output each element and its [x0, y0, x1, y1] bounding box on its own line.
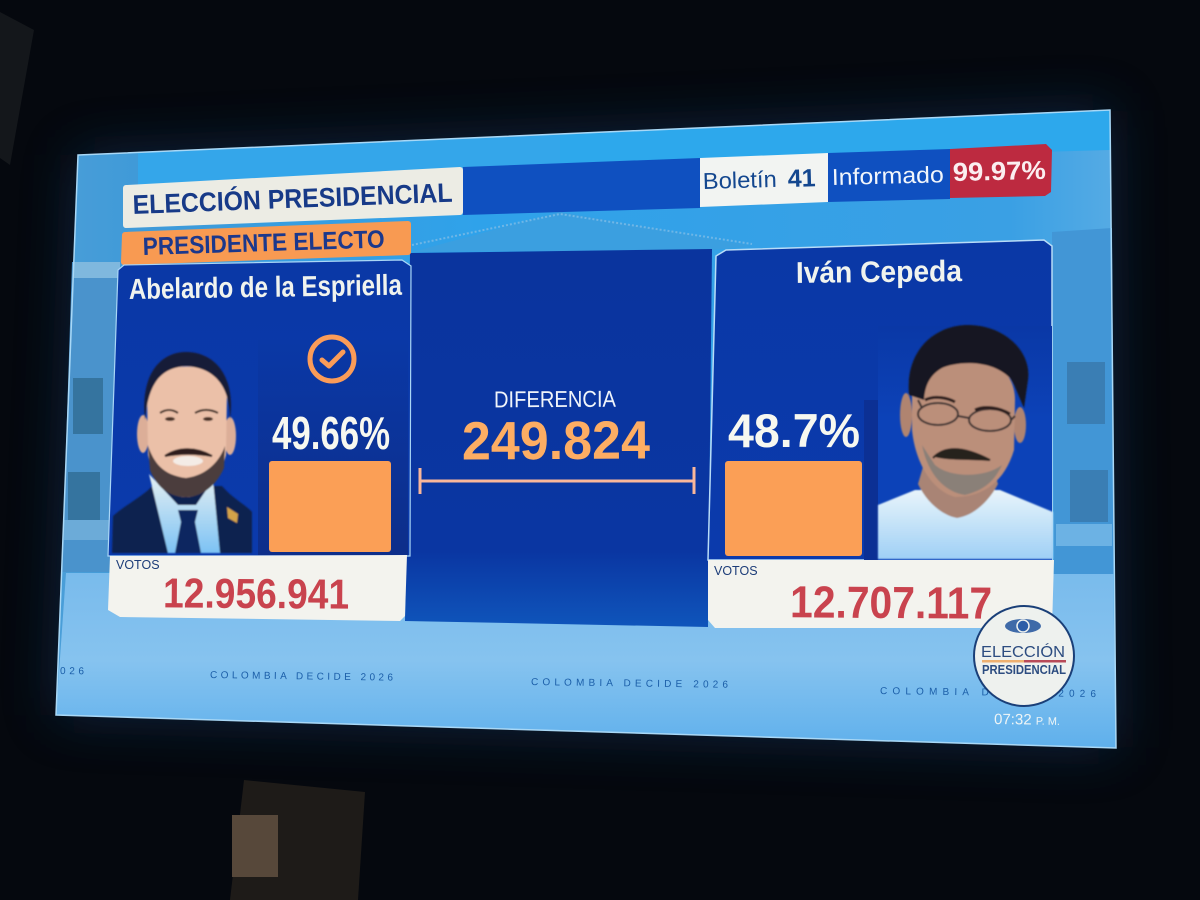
header: reported percentage: [828, 144, 1052, 202]
footer ticker text: 026: [60, 666, 85, 677]
percentage: Abelardo: 49.66%: [272, 407, 390, 459]
palace backdrop right: [1052, 228, 1114, 574]
object at bottom of the room: [230, 780, 365, 900]
center panel: difference: [405, 249, 712, 627]
header: bulletin: Boletín: [702, 166, 777, 194]
portrait: Abelardo: [112, 352, 252, 553]
election logo: ELECCIÓN: [981, 642, 1065, 661]
votes value: 12.707.117: [790, 576, 992, 629]
header: bulletin: [700, 153, 828, 207]
header: reported percentage: 99.97%: [952, 155, 1046, 187]
panel: Abelardo de la Espriella: [108, 260, 411, 621]
percentage: Iván: 48.7%: [728, 404, 860, 457]
votes label: VOTOS: [714, 564, 758, 578]
footer ticker text: COLOMBIA DECIDE 2026: [531, 677, 729, 691]
screen glow: [56, 110, 1116, 748]
label: diferencia: DIFERENCIA: [494, 386, 617, 412]
bright screen edge: [56, 110, 1116, 748]
TV screen: [56, 110, 1116, 748]
clock: 07:32 P. M.: [994, 711, 1060, 729]
footer ticker text: COLOMBIA DECIDE 2026: [210, 670, 394, 684]
bar: Abelardo: [269, 461, 391, 552]
header: bulletin: 41: [787, 164, 816, 193]
votes label: VOTOS: [116, 558, 160, 572]
floor: [56, 573, 1116, 748]
footer ticker text: [60, 666, 1097, 700]
palace pediment: [412, 212, 752, 252]
panel: Iván Cepeda: [708, 240, 1054, 629]
election logo: PRESIDENCIAL: [982, 663, 1066, 677]
header: blue strip: [463, 158, 700, 215]
icon: check badge: [310, 337, 354, 381]
bar: Iván: [725, 461, 862, 556]
votes box: [108, 555, 407, 621]
candidate name: Abelardo de la Espriella: [129, 270, 403, 306]
candidate name: Iván Cepeda: [796, 255, 962, 290]
votes box: [708, 560, 1054, 628]
wall-mounted device top left: [0, 12, 34, 165]
difference bracket: [420, 467, 694, 494]
value: difference votes: 249.824: [462, 411, 650, 471]
top panels: [138, 134, 560, 185]
votes value: 12.956.941: [163, 569, 349, 618]
header: election title: ELECCIÓN PRESIDENCIAL: [132, 177, 453, 220]
portrait: Iván: [878, 325, 1053, 559]
election logo: [974, 606, 1074, 706]
tag: president elect: PRESIDENTE ELECTO: [142, 225, 385, 261]
footer ticker text: COLOMBIA DECIDE 2026: [880, 686, 1097, 700]
palace backdrop left: [62, 262, 120, 572]
header: reported percentage: Informado: [831, 161, 944, 190]
